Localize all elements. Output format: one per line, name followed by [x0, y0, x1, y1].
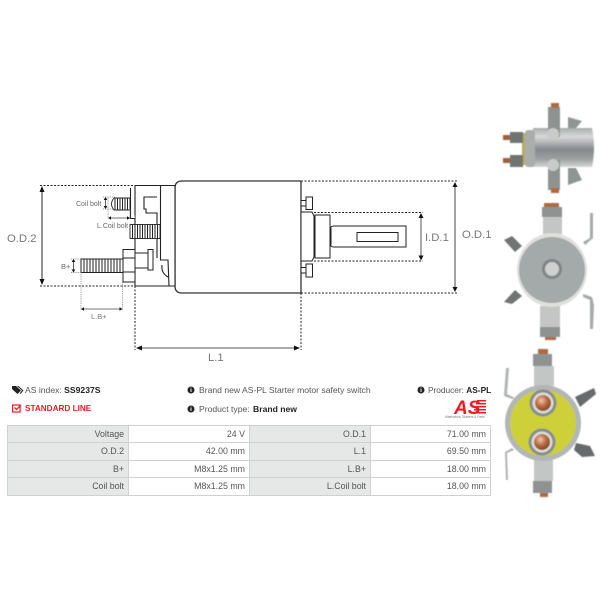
- coil bolt dimensions: Coil bolt: [76, 201, 101, 208]
- row: B+, L.B+: M8x1.25 mm: [194, 464, 245, 474]
- row: coil bolt, L.coil bolt: Coil bolt: [92, 481, 124, 491]
- I.D.1 dimension: I.D.1: [425, 232, 449, 244]
- row: voltage, O.D.1: [8, 426, 490, 442]
- B+ dimensions: L.B+: [91, 312, 107, 321]
- O.D.1 dimension: [301, 181, 492, 293]
- icon: info producer: [418, 386, 424, 394]
- logo: AS-PL: AS: [453, 398, 481, 419]
- row: O.D.2, L.1: L.1: [354, 446, 366, 456]
- coil bolt dimensions: L.Coil bolt: [97, 223, 128, 230]
- L.1 dimension: [135, 286, 301, 364]
- row: voltage, O.D.1: 71.00 mm: [447, 429, 486, 439]
- icon: info description: [188, 386, 194, 394]
- solenoid body: [175, 181, 301, 293]
- row: B+, L.B+: [8, 461, 490, 477]
- icon: tags: [12, 386, 24, 394]
- terminal end cap: [130, 186, 175, 286]
- producer: Producer: AS-PL: [428, 385, 491, 395]
- row: O.D.2, L.1: 42.00 mm: [206, 446, 245, 456]
- row: O.D.2, L.1: 69.50 mm: [447, 446, 486, 456]
- product description: Brand new AS-PL Starter motor safety switch: [199, 385, 371, 395]
- icon: info product type: [188, 406, 194, 412]
- B+ dimensions: [61, 259, 122, 321]
- L.1 dimension: L.1: [208, 352, 224, 364]
- O.D.2 dimension: O.D.2: [7, 233, 37, 245]
- row: O.D.2, L.1: [8, 443, 490, 460]
- logo: AS-PL: [445, 398, 486, 419]
- row: B+, L.B+: B+: [113, 464, 124, 474]
- row: B+, L.B+: L.B+: [348, 464, 366, 474]
- row: voltage, O.D.1: Voltage: [95, 429, 124, 439]
- B+ dimensions: B+: [61, 262, 71, 271]
- B+ terminal stud: [81, 250, 153, 282]
- row: B+, L.B+: 18.00 mm: [447, 464, 486, 474]
- row: voltage, O.D.1: O.D.1: [343, 429, 366, 439]
- technical drawing: [7, 180, 492, 364]
- logo: AS-PL: Alternators, Starters & Parts: [445, 415, 485, 419]
- photo: solenoid side view: [503, 103, 594, 193]
- coil bolt dimensions: [76, 197, 130, 230]
- product type: Product type: Brand new: [199, 404, 297, 414]
- row: coil bolt, L.coil bolt: M8x1.25 mm: [194, 481, 245, 491]
- O.D.1 dimension: O.D.1: [462, 229, 492, 241]
- O.D.2 dimension: [7, 186, 135, 286]
- row: coil bolt, L.coil bolt: [8, 478, 490, 495]
- photo: solenoid terminal view: [504, 349, 596, 497]
- icon: checked box: [12, 404, 22, 413]
- plunger and mounting screws: [301, 197, 406, 277]
- product photos: [502, 102, 596, 498]
- I.D.1 dimension: [314, 212, 449, 261]
- row: O.D.2, L.1: O.D.2: [101, 446, 124, 456]
- row: coil bolt, L.coil bolt: L.Coil bolt: [327, 481, 366, 491]
- photo: solenoid rear view: [504, 203, 594, 340]
- coil bolt: [112, 198, 160, 238]
- standard line label: STANDARD LINE: [25, 404, 91, 413]
- row: coil bolt, L.coil bolt: 18.00 mm: [447, 481, 486, 491]
- row: voltage, O.D.1: 24 V: [227, 429, 245, 439]
- specification table: [7, 425, 491, 496]
- AS index: AS index: SS9237S: [25, 385, 100, 395]
